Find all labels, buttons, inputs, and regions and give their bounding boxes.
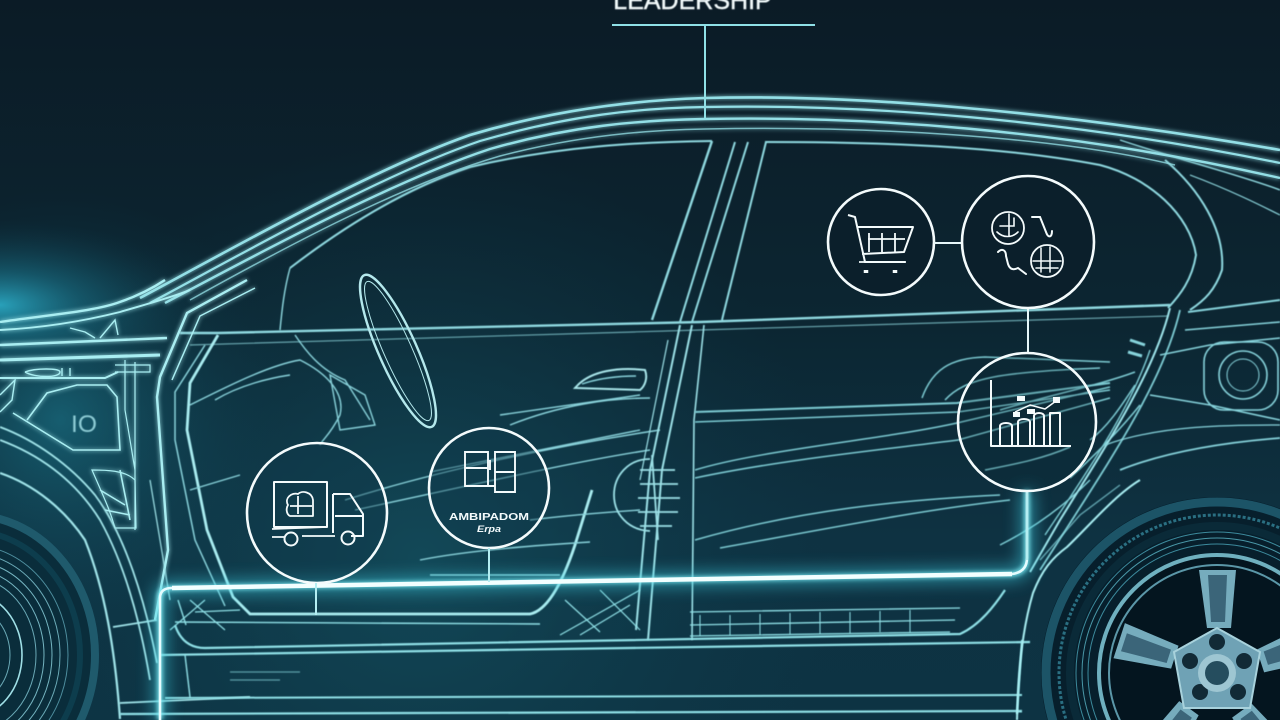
floor plan caption: Erpa xyxy=(477,524,501,534)
car side windows and pillars xyxy=(180,140,1280,345)
icon circle: delivery truck xyxy=(247,443,387,583)
wheel hub xyxy=(1174,628,1260,708)
right wheel arch xyxy=(1017,480,1140,720)
rear quarter details and tail light xyxy=(1105,300,1280,470)
icon circle: shopping cart xyxy=(828,189,934,295)
lower body sill lines xyxy=(120,590,1030,714)
front hood and headlight xyxy=(0,280,255,620)
front fender text: IO xyxy=(71,411,97,438)
wheel spokes xyxy=(1113,570,1280,720)
steering wheel xyxy=(347,267,449,435)
door seam and fuel cap xyxy=(614,325,704,640)
connector lines between icon circles xyxy=(316,243,1028,615)
floor plan caption: AMBIPADOM xyxy=(449,512,529,523)
icon circle: global exchange xyxy=(962,176,1094,308)
heading connector xyxy=(612,25,815,119)
glowing base line xyxy=(160,490,1027,720)
front door interior lines xyxy=(175,335,660,614)
icon circle: floor plan label xyxy=(429,428,549,548)
icon circle: growth bar chart xyxy=(958,353,1096,491)
right wheel xyxy=(1041,497,1280,720)
left wheel xyxy=(0,515,99,720)
car roof lines xyxy=(140,97,1280,303)
rear door lines xyxy=(695,308,1180,572)
left wheel arch xyxy=(0,427,250,719)
floor plan caption xyxy=(449,512,529,534)
